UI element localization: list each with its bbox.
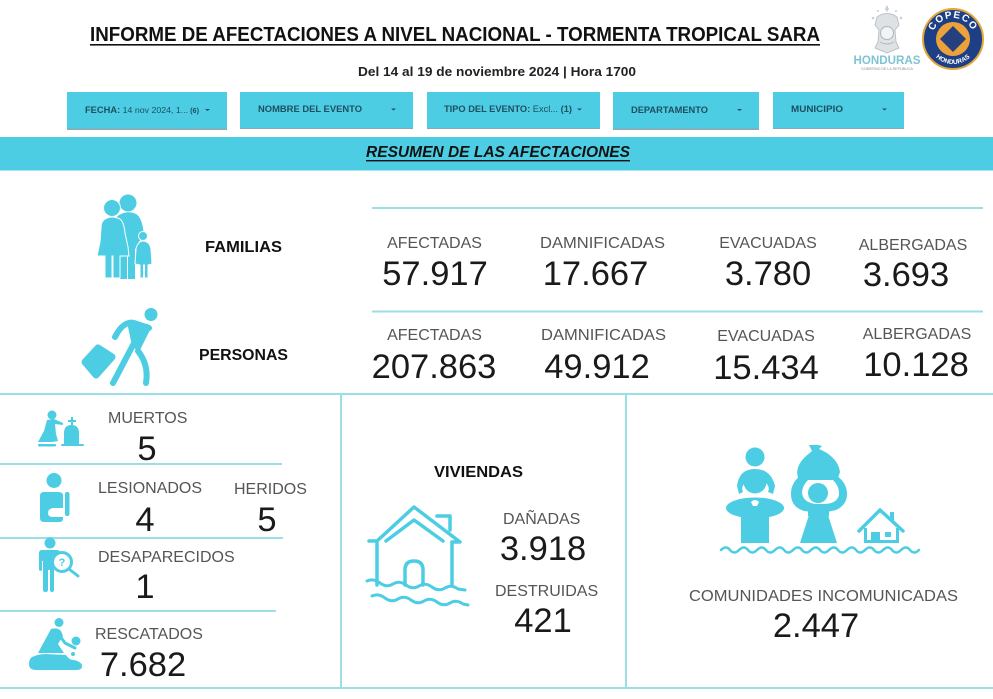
personas: albergadas: ALBERGADAS bbox=[863, 326, 971, 343]
familias: damnificadas bbox=[540, 235, 665, 293]
familias: albergadas bbox=[859, 237, 967, 294]
filter: tipo del evento: TIPO DEL EVENTO: Excl... (1) bbox=[444, 104, 572, 114]
personas: damnificadas: 49.912 bbox=[544, 348, 650, 386]
title: INFORME DE AFECTACIONES A NIVEL NACIONAL - TORMENTA TROPICAL SARA bbox=[90, 24, 820, 46]
icon: missing person search bbox=[39, 538, 78, 592]
icon: cut-off community bbox=[721, 445, 919, 552]
logo: COPECO bbox=[922, 8, 984, 70]
muertos bbox=[108, 410, 187, 468]
viviendas: destruidas: DESTRUIDAS bbox=[495, 583, 598, 600]
icon: family bbox=[97, 194, 152, 279]
desaparecidos: 1 bbox=[135, 568, 155, 606]
icon: rescue bbox=[29, 618, 82, 670]
personas: albergadas bbox=[863, 326, 971, 384]
rescatados: 7.682 bbox=[100, 646, 186, 684]
filter: nombre del evento bbox=[240, 92, 413, 129]
filter: tipo del evento bbox=[427, 92, 600, 129]
viviendas: danadas: DAÑADAS bbox=[503, 508, 580, 528]
familias: afectadas: 57.917 bbox=[382, 255, 488, 293]
familias: damnificadas: 17.667 bbox=[543, 255, 648, 293]
personas: damnificadas: DAMNIFICADAS bbox=[541, 327, 666, 344]
logo: Honduras bbox=[854, 5, 921, 71]
familias: albergadas: ALBERGADAS bbox=[859, 237, 967, 254]
heridos: 5 bbox=[257, 501, 277, 539]
rescatados: RESCATADOS bbox=[95, 626, 203, 643]
filter: nombre del evento: NOMBRE DEL EVENTO bbox=[258, 104, 362, 114]
filter: municipio: MUNICIPIO bbox=[791, 104, 843, 114]
desaparecidos bbox=[98, 549, 235, 606]
personas: afectadas: AFECTADAS bbox=[387, 327, 482, 344]
lesionados: 4 bbox=[135, 501, 155, 539]
personas: afectadas: 207.863 bbox=[372, 348, 496, 386]
viviendas: destruidas bbox=[495, 583, 598, 640]
personas: evacuadas: EVACUADAS bbox=[717, 328, 815, 345]
familias: albergadas: 3.693 bbox=[863, 256, 949, 294]
filter: fecha: FECHA: 14 nov 2024, 1... (6) bbox=[85, 105, 199, 115]
lesionados bbox=[98, 480, 202, 539]
muertos: 5 bbox=[137, 430, 157, 468]
filter: departamento bbox=[613, 92, 759, 130]
familias: damnificadas: DAMNIFICADAS bbox=[540, 235, 665, 252]
icon: missing person search: ? bbox=[59, 557, 66, 569]
lesionados: LESIONADOS bbox=[98, 480, 202, 497]
section banner bbox=[0, 137, 993, 170]
icon: injured person bbox=[40, 473, 70, 522]
familias: afectadas bbox=[382, 235, 488, 293]
logo: COPECO: HONDURAS bbox=[936, 54, 970, 64]
label: familias: FAMILIAS bbox=[205, 239, 282, 256]
viviendas: destruidas: 421 bbox=[514, 602, 572, 640]
desaparecidos: DESAPARECIDOS bbox=[98, 549, 235, 566]
personas: evacuadas bbox=[713, 328, 819, 387]
viviendas: danadas bbox=[500, 508, 586, 568]
icon: person with suitcase bbox=[85, 308, 158, 383]
heridos: HERIDOS bbox=[234, 481, 307, 498]
heridos bbox=[234, 481, 307, 539]
filter: municipio bbox=[773, 92, 904, 129]
familias: evacuadas: 3.780 bbox=[725, 255, 811, 293]
logo: Honduras: GOBIERNO DE LA REPÚBLICA bbox=[861, 66, 914, 71]
familias: evacuadas bbox=[719, 235, 817, 293]
heading: viviendas: VIVIENDAS bbox=[434, 464, 523, 481]
label: personas: PERSONAS bbox=[199, 347, 288, 364]
personas: albergadas: 10.128 bbox=[863, 346, 969, 384]
logo: Honduras: HONDURAS bbox=[854, 55, 921, 67]
icon: flooded house bbox=[367, 507, 468, 605]
familias: evacuadas: EVACUADAS bbox=[719, 235, 817, 252]
viviendas: danadas: 3.918 bbox=[500, 530, 586, 568]
comunidades incomunicadas: COMUNIDADES INCOMUNICADAS bbox=[689, 588, 958, 605]
muertos: MUERTOS bbox=[108, 410, 187, 427]
logo: COPECO: COPECO bbox=[928, 11, 976, 30]
comunidades incomunicadas: 2.447 bbox=[773, 607, 859, 645]
icon: mourner at grave bbox=[38, 410, 84, 446]
personas: afectadas bbox=[372, 327, 496, 386]
filter: fecha bbox=[67, 92, 227, 130]
subtitle: date and time: Del 14 al 19 de noviembre 2024 | Hora 1700 bbox=[358, 64, 636, 79]
filter: departamento: DEPARTAMENTO bbox=[631, 105, 708, 115]
personas: damnificadas bbox=[541, 327, 666, 386]
section banner: RESUMEN DE LAS AFECTACIONES bbox=[366, 144, 630, 161]
comunidades incomunicadas bbox=[689, 588, 958, 645]
familias: afectadas: AFECTADAS bbox=[387, 235, 482, 252]
personas: evacuadas: 15.434 bbox=[713, 349, 819, 387]
rescatados bbox=[95, 626, 203, 684]
